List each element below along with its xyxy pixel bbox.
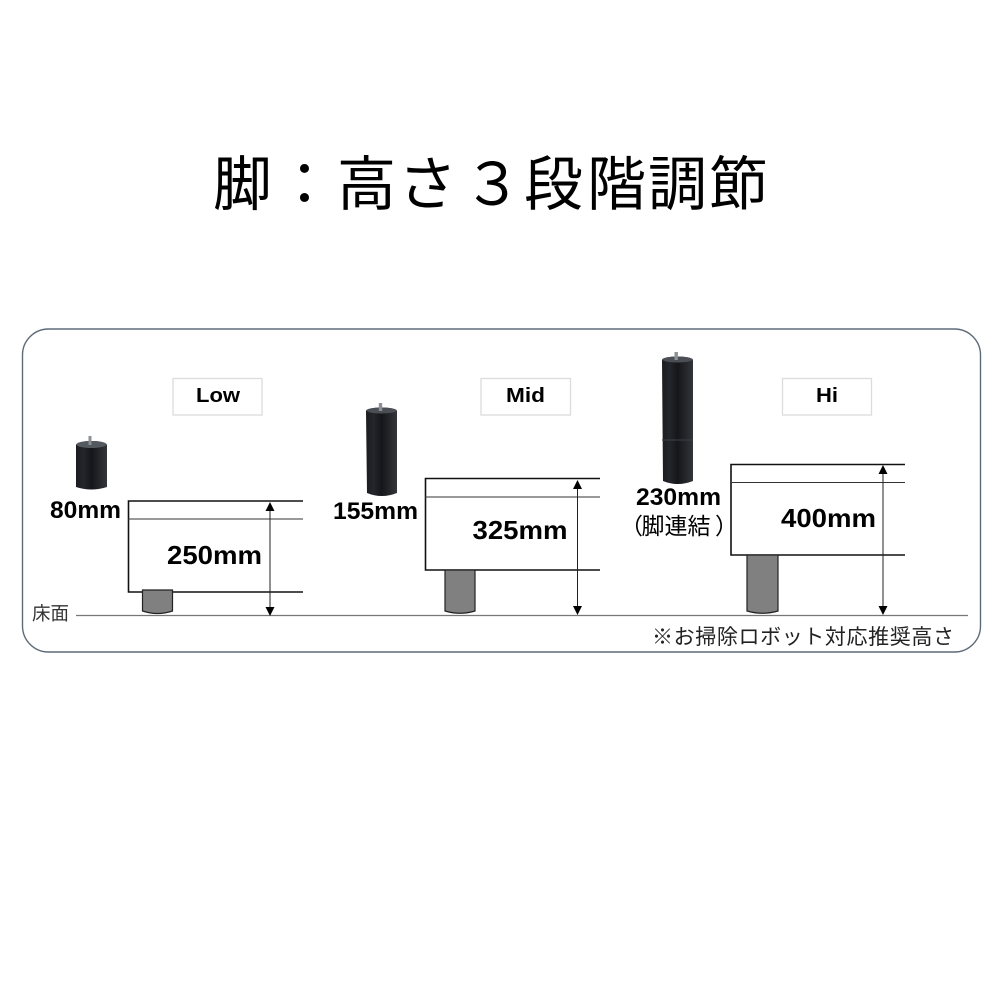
label: Low: Low <box>196 385 240 407</box>
label: Low <box>173 378 262 415</box>
group: Low <box>50 378 303 616</box>
floor label: 床面 <box>32 600 69 626</box>
sofa diagram: Low <box>128 501 303 592</box>
label: Hi: Hi <box>816 385 838 407</box>
leg size: 230mm joined <box>620 484 738 541</box>
icon: 155mm leg photo <box>366 403 397 496</box>
label: Hi <box>782 378 872 415</box>
label: Mid: Mid <box>506 385 545 407</box>
arrow: Mid height <box>573 480 582 615</box>
arrow: Hi height <box>878 465 888 615</box>
sofa diagram: Mid <box>425 478 600 570</box>
total height: 325mm: 325mm <box>472 515 568 545</box>
arrow: Low height <box>266 502 274 616</box>
label: Mid <box>481 378 570 415</box>
icon: 230mm leg photo <box>662 352 693 484</box>
floor line <box>76 614 968 616</box>
group: Hi <box>620 352 905 615</box>
leg size: 230mm joined: 230mm <box>636 484 721 511</box>
sofa diagram: Hi <box>731 464 905 555</box>
leg size: 80mm: 80mm <box>50 497 121 524</box>
icon: 80mm leg photo <box>76 436 107 490</box>
total height: 250mm: 250mm <box>167 540 262 570</box>
footnote: robot vacuum note: ※お掃除ロボット対応推奨高さ <box>652 621 954 651</box>
leg: Hi <box>747 555 778 613</box>
group: Mid <box>333 378 600 615</box>
total height: 400mm: 400mm <box>781 503 876 533</box>
leg: Mid <box>445 570 475 613</box>
panel: height comparison <box>22 329 980 652</box>
title: 脚：高さ３段階調節 <box>213 137 768 222</box>
leg size: 155mm: 155mm <box>333 498 418 525</box>
leg size: 230mm joined: （脚連結） <box>620 507 738 541</box>
leg: Low <box>142 590 172 614</box>
